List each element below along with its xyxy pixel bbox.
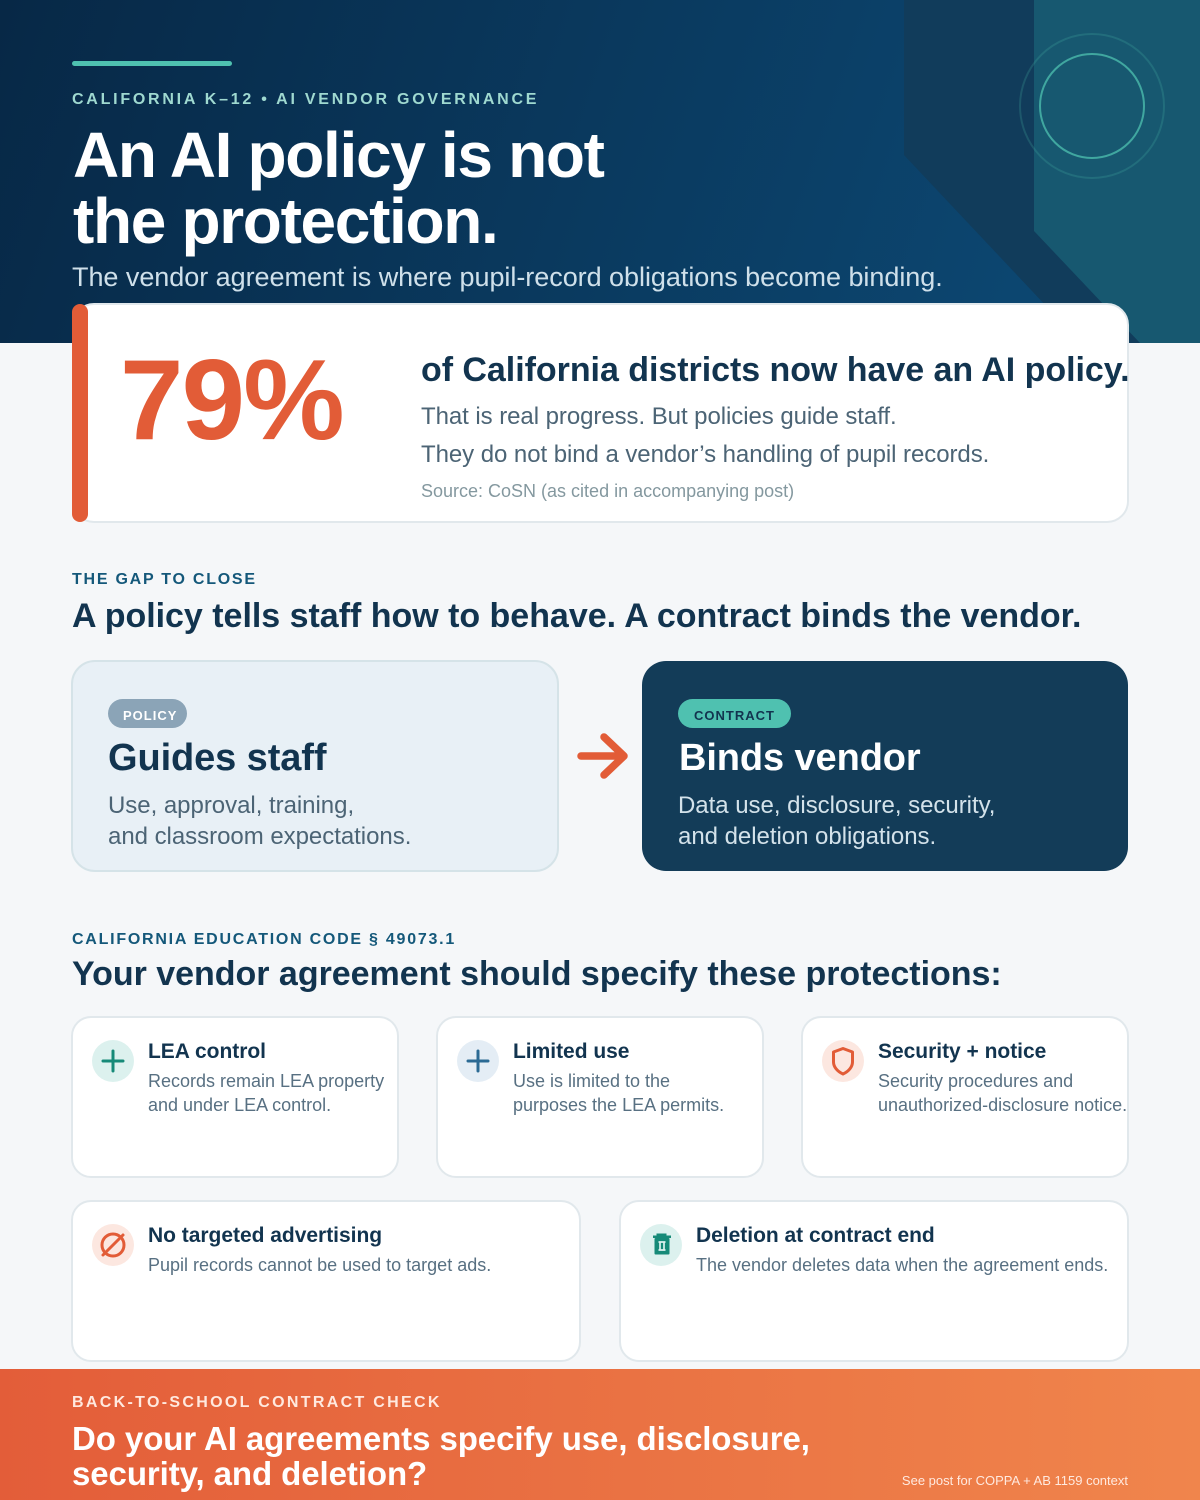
- card body: Use, approval, training,: [108, 792, 354, 819]
- big number: 79%: [120, 337, 343, 464]
- card title: Security + notice: [878, 1040, 1046, 1063]
- pill: [678, 699, 791, 728]
- card title: LEA control: [148, 1040, 266, 1063]
- red accent: [72, 304, 88, 522]
- card body: and deletion obligations.: [678, 823, 936, 850]
- card text: purposes the LEA permits.: [513, 1095, 724, 1115]
- card: LEA control: [71, 1016, 399, 1178]
- card title: Guides staff: [108, 737, 326, 779]
- card title: Binds vendor: [679, 737, 921, 779]
- title: An AI policy is not: [73, 119, 604, 191]
- card text: [878, 1071, 1127, 1115]
- title: the protection.: [73, 185, 498, 257]
- eyebrow: THE GAP TO CLOSE: [72, 571, 257, 588]
- card text: and under LEA control.: [148, 1095, 331, 1115]
- stat body: That is real progress. But policies guide staff.: [421, 403, 897, 430]
- icon: plus: [457, 1040, 499, 1082]
- footer eyebrow: BACK-TO-SCHOOL CONTRACT CHECK: [72, 1394, 442, 1411]
- card text: unauthorized-disclosure notice.: [878, 1095, 1127, 1115]
- icon: trash bin: [640, 1224, 682, 1266]
- pill: POLICY: [123, 708, 177, 723]
- title: [73, 119, 604, 257]
- heading: Your vendor agreement should specify these protections:: [72, 955, 1002, 993]
- eyebrow: header: CALIFORNIA K–12 • AI VENDOR GOVERNANCE: [72, 91, 539, 108]
- card text: The vendor deletes data when the agreement ends.: [696, 1255, 1108, 1275]
- icon: plus: [92, 1040, 134, 1082]
- card title: No targeted advertising: [148, 1224, 382, 1247]
- card body: Data use, disclosure, security,: [678, 792, 995, 819]
- icon: prohibited: [92, 1224, 134, 1266]
- pill: CONTRACT: [694, 708, 775, 723]
- panel: contract: [642, 661, 1128, 871]
- card text: Pupil records cannot be used to target ads.: [148, 1255, 491, 1275]
- card body: [678, 792, 995, 850]
- stat headline: of California districts now have an AI policy.: [421, 351, 1130, 389]
- footer question: Do your AI agreements specify use, disclosure,: [72, 1420, 810, 1457]
- card background: [72, 303, 1129, 523]
- icon: shield: [822, 1040, 864, 1082]
- card text: [148, 1071, 384, 1115]
- panel: policy: [71, 660, 559, 872]
- card text: Use is limited to the: [513, 1071, 670, 1091]
- card: Limited use: [436, 1016, 764, 1178]
- card title: Deletion at contract end: [696, 1224, 935, 1247]
- accent bar: [72, 61, 232, 66]
- stat body: [421, 403, 989, 468]
- card text: Records remain LEA property: [148, 1071, 384, 1091]
- subtitle: The vendor agreement is where pupil-record obligations become binding.: [72, 262, 943, 292]
- eyebrow: CALIFORNIA EDUCATION CODE § 49073.1: [72, 931, 456, 948]
- header band: [0, 0, 1200, 343]
- source: Source: CoSN (as cited in accompanying post): [421, 481, 794, 501]
- footer question: security, and deletion?: [72, 1455, 427, 1492]
- section heading: protections: [72, 931, 1002, 993]
- card text: [513, 1071, 724, 1115]
- card body: [108, 792, 411, 850]
- card: Security + notice: [801, 1016, 1129, 1178]
- card: Deletion at contract end: [619, 1200, 1129, 1362]
- pill: [108, 699, 187, 728]
- card text: Security procedures and: [878, 1071, 1073, 1091]
- footer note: See post for COPPA + AB 1159 context: [902, 1473, 1128, 1488]
- panel: statistic: [72, 303, 1130, 523]
- footer call to action: [0, 1369, 1200, 1500]
- card title: Limited use: [513, 1040, 629, 1063]
- footer question: [72, 1420, 810, 1492]
- arrow: [577, 733, 628, 779]
- stat body: They do not bind a vendor’s handling of pupil records.: [421, 441, 989, 468]
- card body: and classroom expectations.: [108, 823, 411, 850]
- section heading: gap: [72, 571, 1081, 635]
- card: No targeted advertising: [71, 1200, 581, 1362]
- heading: A policy tells staff how to behave. A contract binds the vendor.: [72, 597, 1081, 635]
